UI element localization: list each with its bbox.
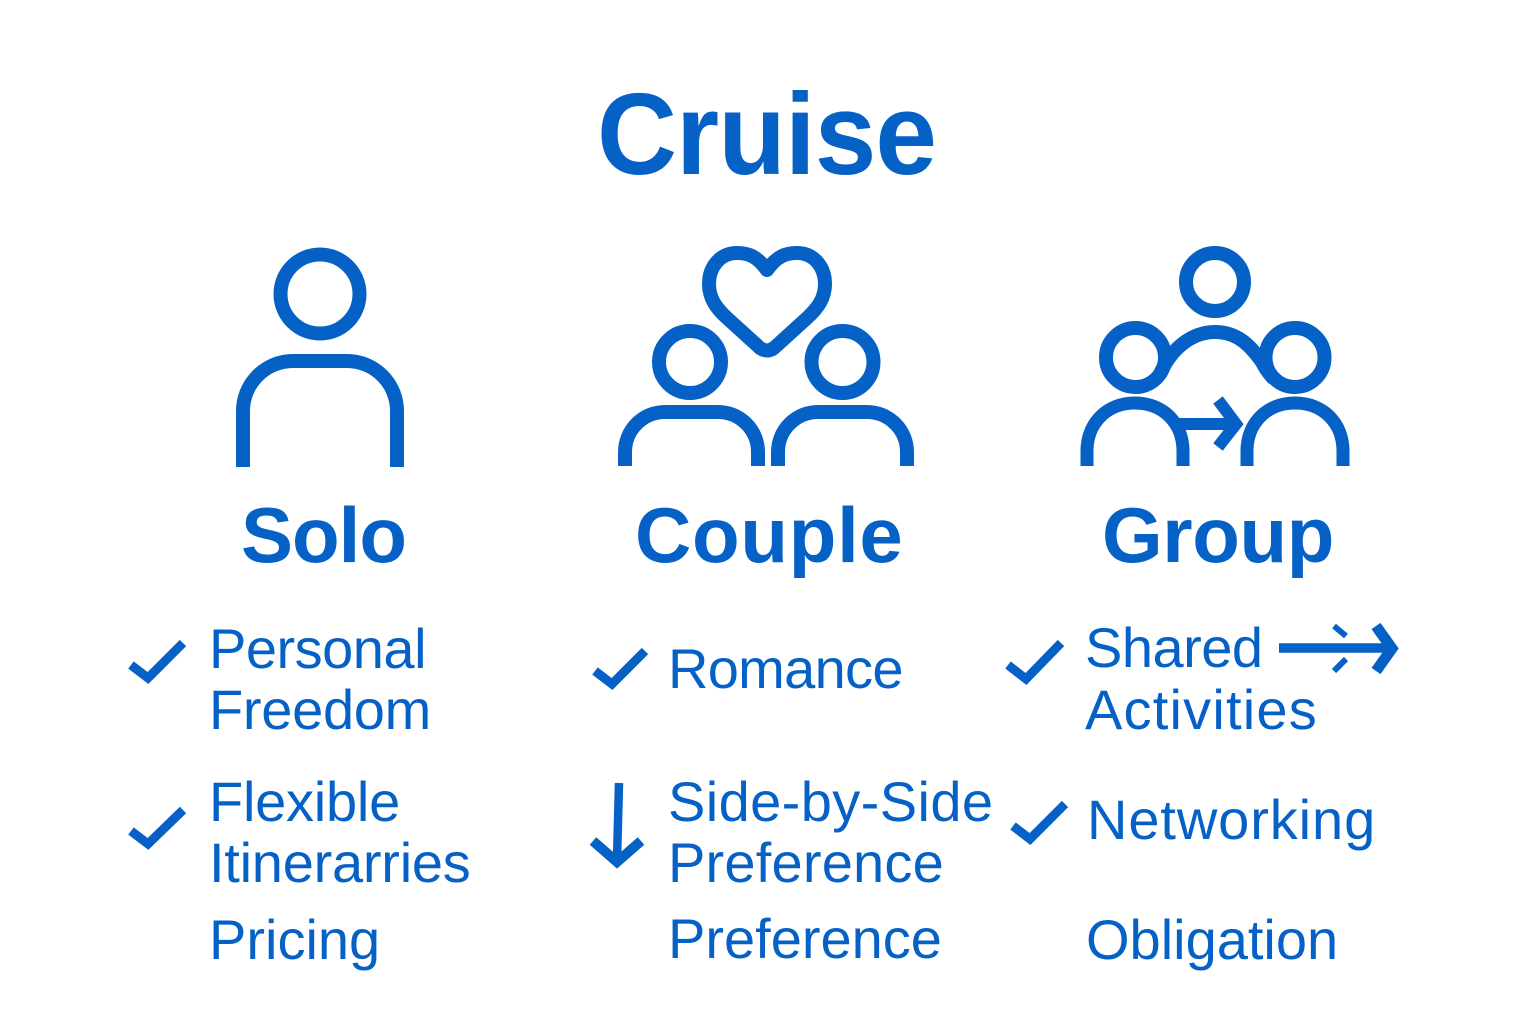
item: Flexible Itinerarries: Itinerarries (209, 831, 471, 894)
item: Personal Freedom (209, 617, 431, 741)
heading: Solo: Solo (241, 491, 406, 579)
item: Preference: Preference (668, 907, 942, 970)
item: Shared Activities: Shared (1085, 616, 1263, 679)
item: Pricing: Pricing (209, 908, 380, 971)
item: Shared Activities: Activities (1085, 678, 1318, 741)
item: Personal Freedom: Personal (209, 617, 426, 680)
item: Side-by-Side Preference: Preference (668, 831, 944, 894)
item: Romance: Romance (668, 637, 903, 700)
item: Flexible Itinerarries: Flexible (209, 770, 400, 833)
heading: Group: Group (1102, 491, 1334, 579)
item: Side-by-Side Preference (668, 770, 993, 894)
item: Obligation: Obligation (1086, 908, 1338, 971)
item: Flexible Itinerarries (209, 770, 471, 894)
title: Cruise (597, 69, 936, 199)
item: Side-by-Side Preference: Side-by-Side (668, 770, 993, 833)
item: Networking: Networking (1087, 788, 1376, 851)
heading: Couple: Couple (635, 491, 904, 579)
item: Shared Activities (1085, 616, 1318, 741)
item: Personal Freedom: Freedom (209, 678, 431, 741)
